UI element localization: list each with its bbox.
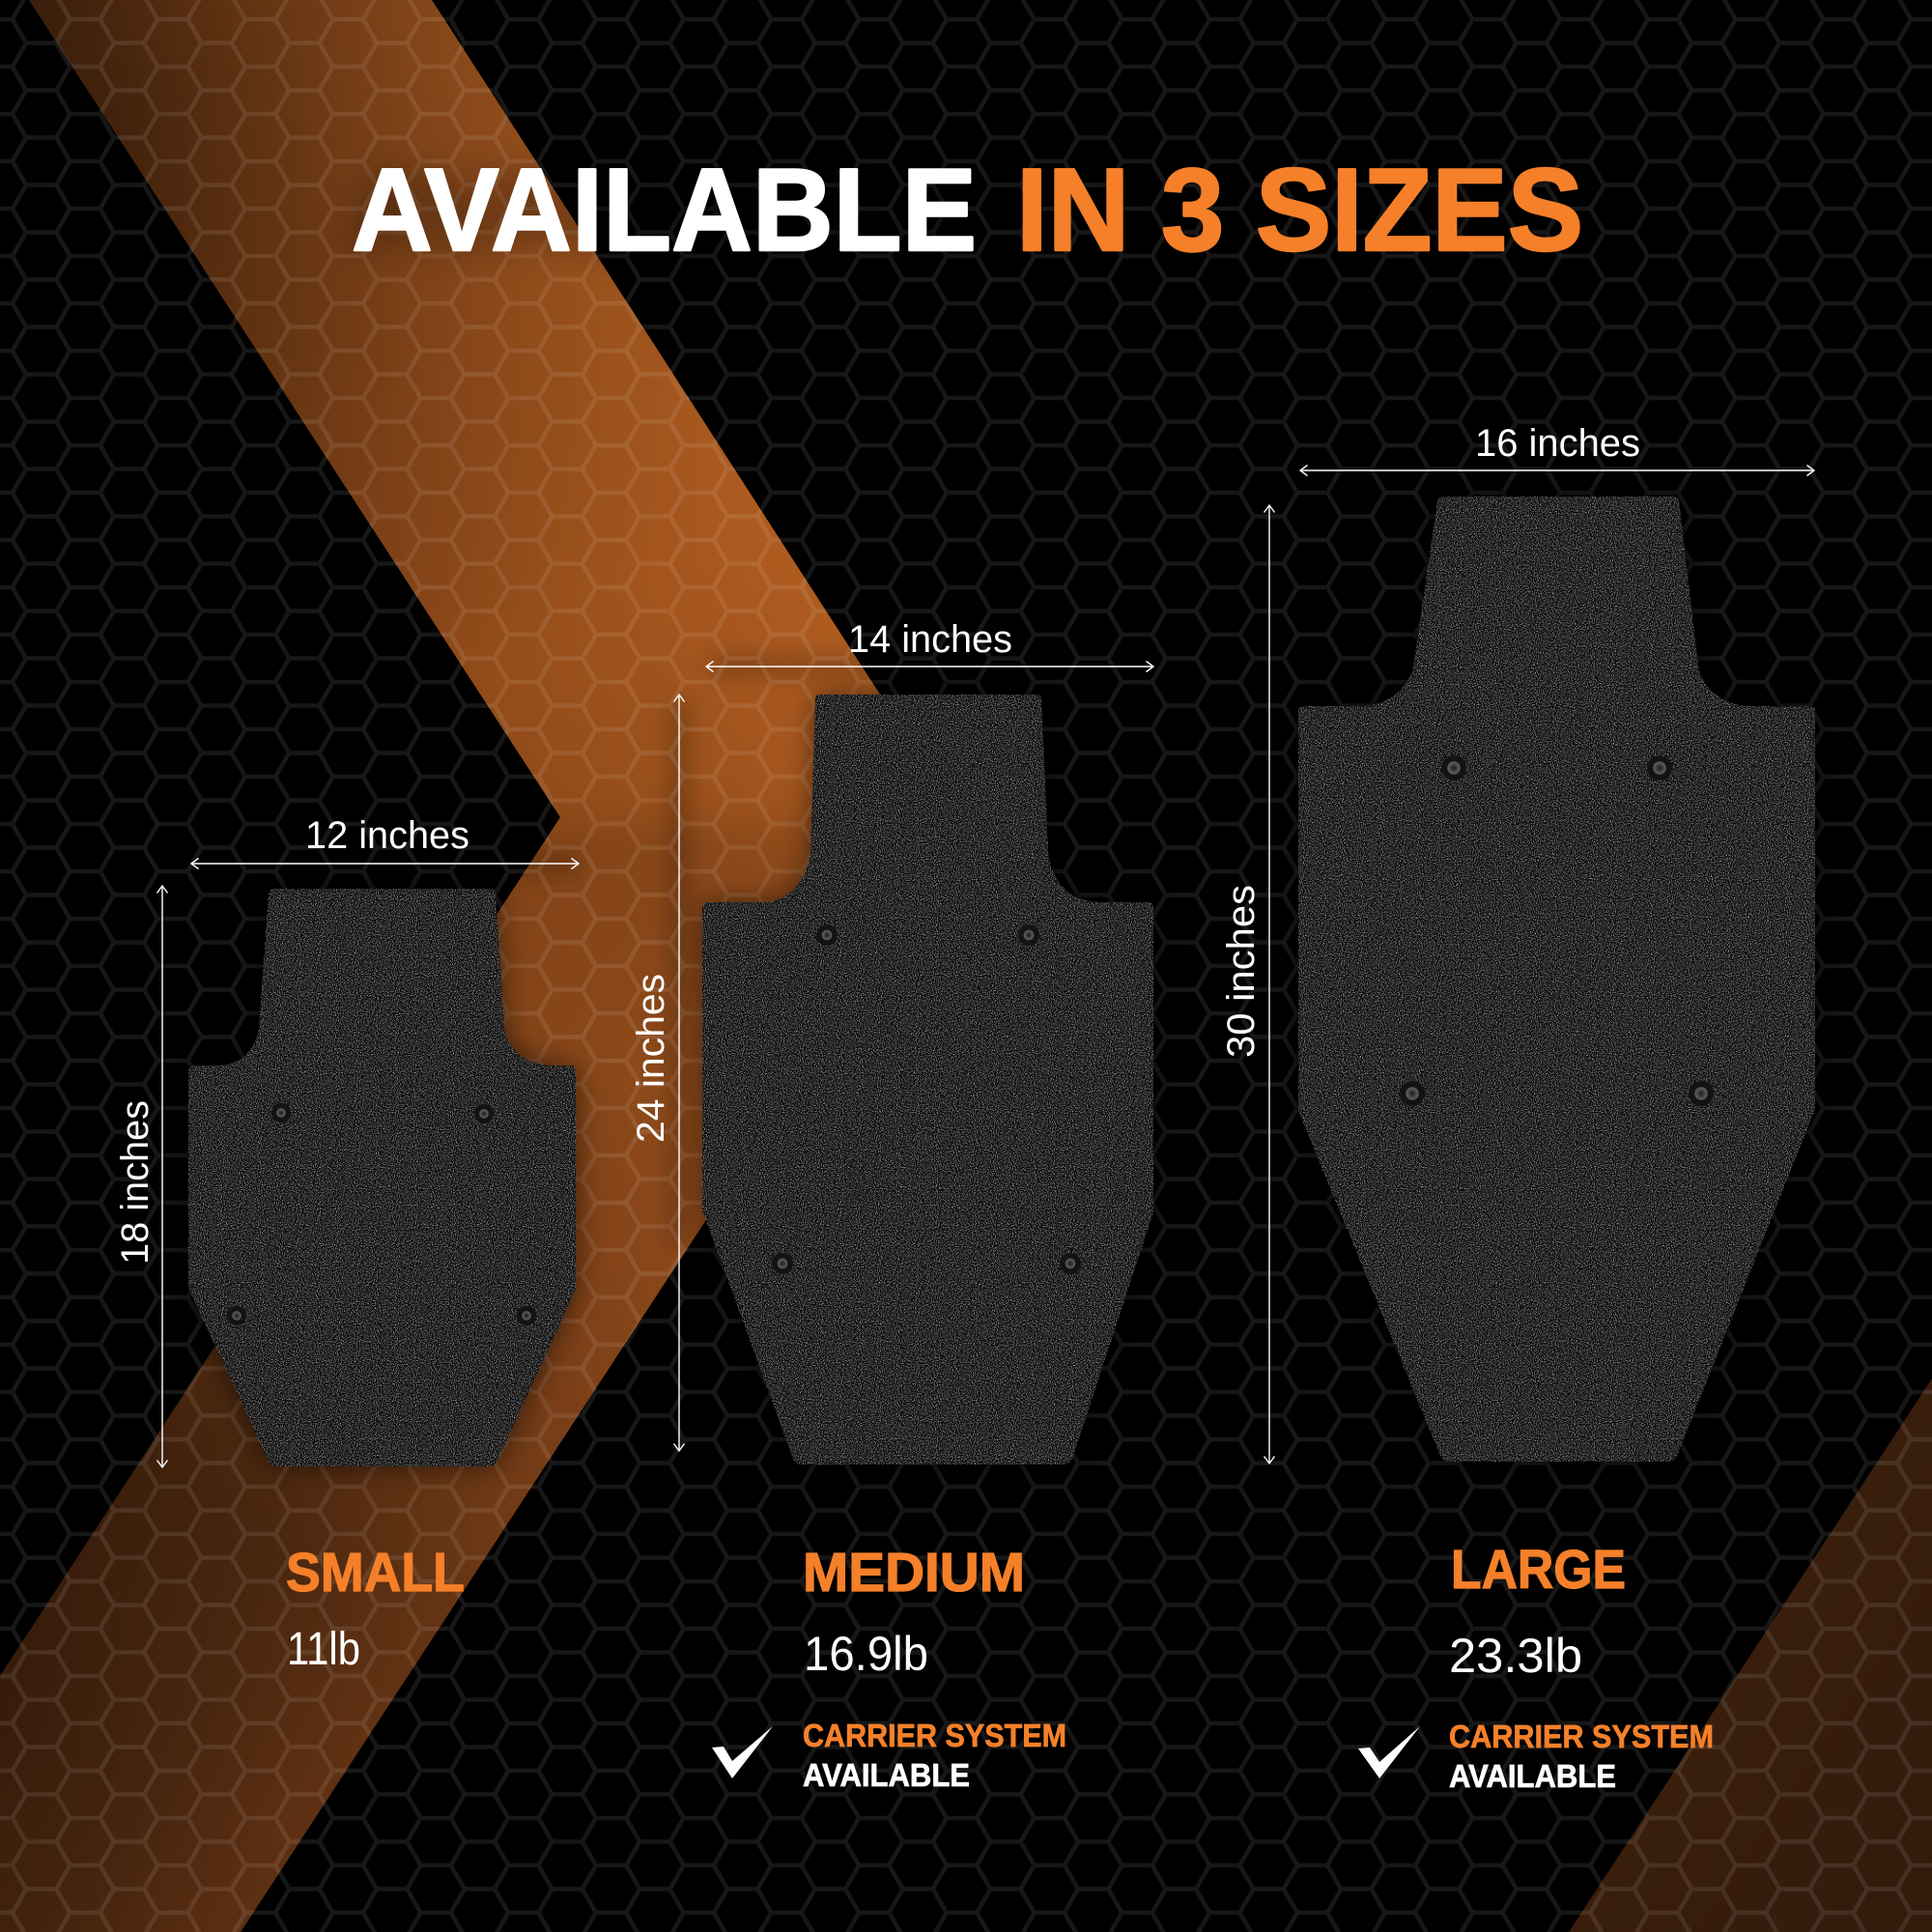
arrow: large width: [1300, 469, 1814, 471]
arrow: large height: [1268, 505, 1270, 1463]
label: LARGE: LARGE: [1451, 1539, 1626, 1601]
orange chevron band: [0, 0, 880, 1932]
arrow: medium height: [678, 695, 680, 1451]
label: 30 inches: 30 inches: [1220, 885, 1263, 1058]
label: MEDIUM: MEDIUM: [803, 1542, 1025, 1604]
label: 14 inches: 14 inches: [848, 618, 1012, 661]
weight: 23.3lb: 23.3lb: [1449, 1629, 1582, 1683]
panel: large plate: [1298, 497, 1815, 1462]
callout: carrier system medium: AVAILABLE: [803, 1757, 970, 1793]
callout: carrier system medium: [803, 1718, 1066, 1793]
title shadow: AVAILABLE: [352, 145, 977, 276]
weight: 16.9lb: 16.9lb: [804, 1627, 928, 1681]
title: AVAILABLE: [352, 144, 977, 275]
arrow: medium width: [706, 666, 1153, 668]
weight: 11lb: 11lb: [287, 1624, 360, 1675]
label: 12 inches: 12 inches: [305, 814, 469, 857]
panel: small plate: [188, 889, 576, 1466]
panel: medium plate: [702, 695, 1153, 1464]
arrow: small width: [191, 863, 579, 865]
label: 16 inches: 16 inches: [1475, 422, 1640, 465]
label: SMALL: SMALL: [286, 1542, 465, 1604]
title: IN 3 SIZES: [1016, 144, 1583, 275]
callout: carrier system large: CARRIER SYSTEM: [1449, 1719, 1714, 1754]
icon: check large: [1358, 1726, 1420, 1778]
title: [352, 144, 1583, 275]
callout: carrier system medium: CARRIER SYSTEM: [803, 1718, 1066, 1753]
callout: carrier system large: [1449, 1719, 1714, 1794]
label: 18 inches: 18 inches: [114, 1100, 156, 1264]
arrow shadows on band: [502, 667, 879, 1246]
callout: carrier system large: AVAILABLE: [1449, 1758, 1616, 1794]
icon: check medium: [712, 1726, 773, 1778]
arrow: small height: [161, 886, 163, 1467]
label: 24 inches: 24 inches: [630, 974, 672, 1143]
orange corner triangle: [1569, 1378, 1932, 1932]
